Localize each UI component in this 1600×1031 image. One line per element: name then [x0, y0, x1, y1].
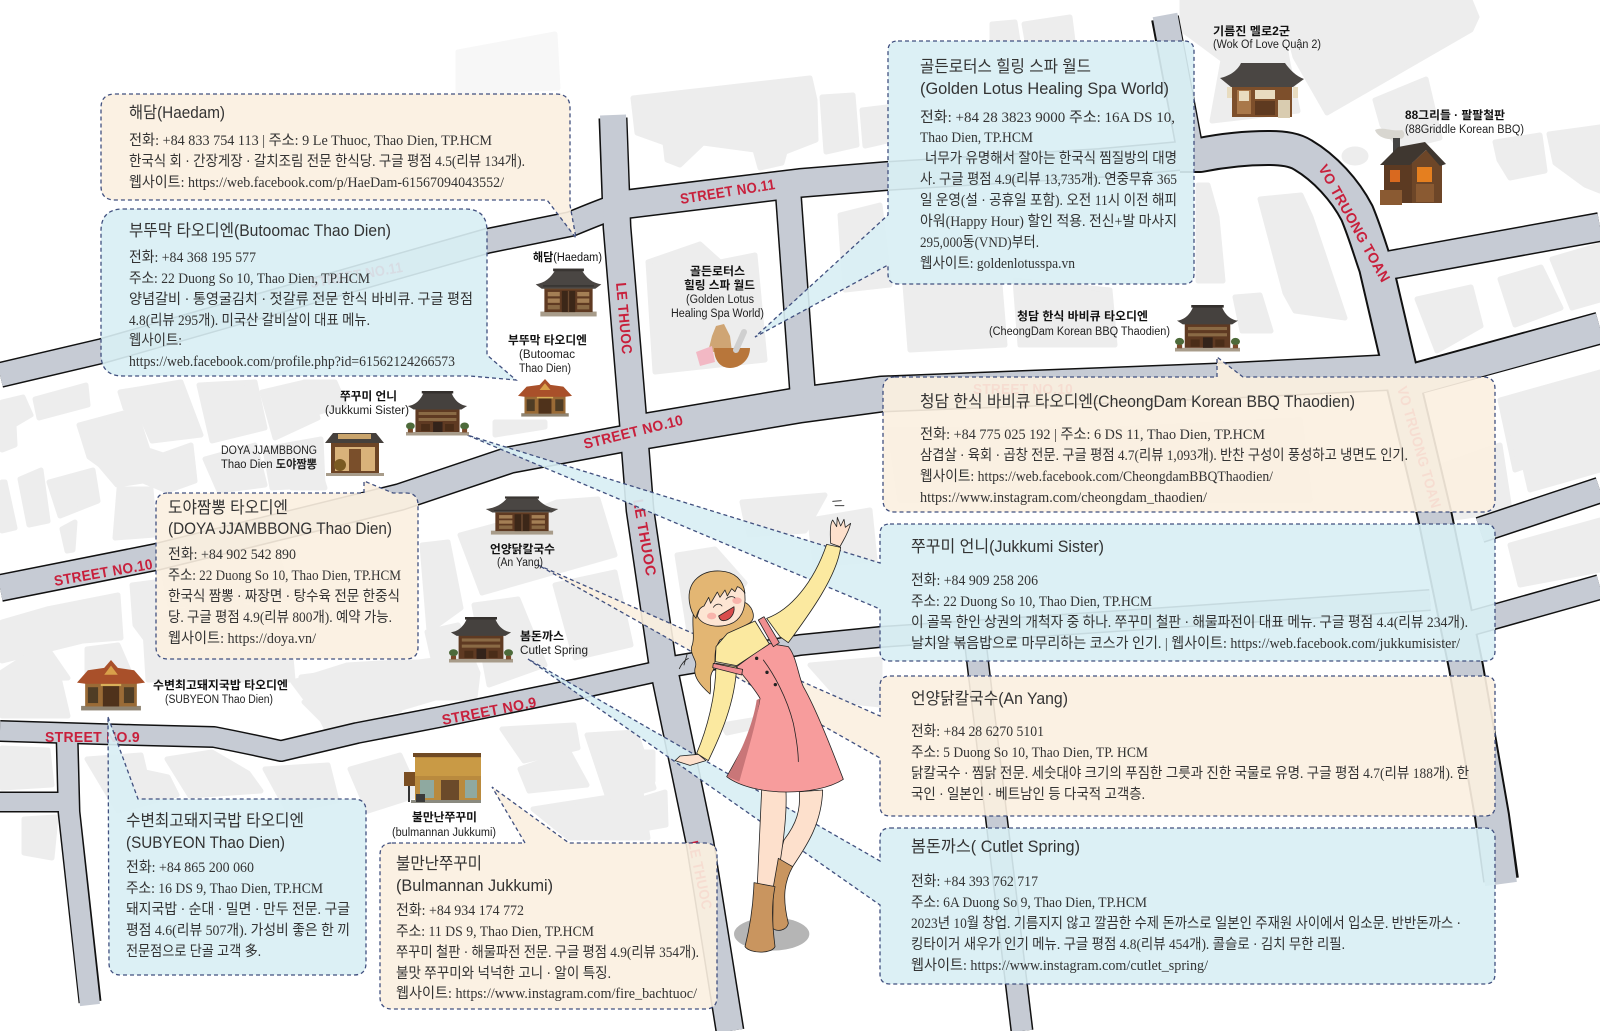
Golden Lotus details: [920, 109, 1177, 272]
Butoomac details: https://web.facebook.com/profile.php?id=61562124266573: [129, 354, 455, 370]
icon: Jukkumi building: [406, 391, 469, 436]
label: CheongDam: [989, 309, 1170, 338]
street name labels: STREET NO.10: [53, 557, 154, 590]
label: Cutlet Spring: [520, 629, 588, 657]
panel: CheongDam: [883, 357, 1495, 512]
Golden Lotus details: 너무가 유명해서 잘아는 한국식 찜질방의 대명: [925, 150, 1177, 167]
street name labels: VO TRUONG TOAN: [1393, 385, 1443, 510]
label: Golden Lotus: (Golden Lotus: [686, 294, 754, 306]
label: Subyeon: (SUBYEON Thao Dien): [165, 694, 273, 706]
street name labels: [45, 162, 1443, 911]
An Yang details: 닭칼국수 · 찜닭 전문. 세숫대야 크기의 푸짐한 그릇과 진한 국물로 유명. 구글 평점 4.7(리뷰 188개). 한: [911, 765, 1469, 782]
Golden Lotus details: 일 운영(설 · 공휴일 포함). 오전 11시 이전 해피: [920, 192, 1177, 209]
label: Cutlet Spring: 봄돈까스: [520, 629, 564, 643]
Cutlet Spring details: 2023년 10월 창업. 기름지지 않고 깔끔한 수제 돈까스로 일본인 주재원 사이에서 입소문. 반반돈까스 ·: [911, 915, 1461, 932]
icon: Golden Lotus spa bowl: [696, 324, 750, 368]
location labels: [153, 24, 1524, 839]
Subyeon title: 수변최고돼지국밥 타오디엔: [126, 811, 304, 830]
panel: Golden Lotus: [755, 41, 1194, 337]
label: Wok of Love: [1213, 24, 1321, 51]
panel: Bulmannan Jukkumi: [380, 787, 717, 1009]
character: waving girl in pink dress: [675, 501, 851, 952]
Bulmannan details: 쭈꾸미 철판 · 해물파전 전문. 구글 평점 4.9(리뷰 354개).: [396, 944, 699, 961]
Jukkumi details: 날치알 볶음밥으로 마무리하는 코스가 인기. | 웹사이트: https://web.facebook.com/jukkumisister/: [911, 635, 1461, 652]
Butoomac details: 양념갈비 · 통영굴김치 · 젓갈류 전문 한식 바비큐. 구글 평점: [129, 291, 473, 308]
Haedam details: 전화: +84 833 754 113 | 주소: 9 Le Thuoc, Thao Dien, TP.HCM: [129, 132, 492, 149]
panel: Cutlet Spring: [528, 659, 1495, 984]
CheongDam details: 웹사이트: https://web.facebook.com/CheongdamBBQThaodien/: [920, 468, 1274, 485]
Jukkumi details: 전화: +84 909 258 206: [911, 572, 1038, 589]
label: Butoomac: [508, 334, 587, 375]
Bulmannan details: 주소: 11 DS 9, Thao Dien, TP.HCM: [396, 924, 594, 940]
icon: Cutlet Spring building: [449, 617, 513, 662]
icon: Butoomac building: [518, 379, 572, 417]
Doya details: 한국식 짬뽕 · 짜장면 · 탕수육 전문 한중식: [168, 588, 400, 605]
panel: Subyeon: (SUBYEON Thao Dien): [126, 834, 285, 852]
label: Wok of Love: 기름진 멜로2군: [1213, 24, 1290, 38]
panel: An Yang: [538, 565, 1495, 816]
CheongDam details: 삼겹살 · 육회 · 곱창 전문. 구글 평점 4.7(리뷰 1,093개). 반찬 구성이 풍성하고 냉면도 인기.: [920, 447, 1408, 464]
label: Wok of Love: (Wok Of Love Quận 2): [1213, 39, 1321, 51]
An Yang details: 전화: +84 28 6270 5101: [911, 723, 1044, 740]
label: 88 Griddle: 88그리들 · 팔팔철판: [1405, 109, 1505, 122]
label: Jukkumi: (Jukkumi Sister): [325, 405, 409, 417]
Golden Lotus details: 전화: +84 28 3823 9000 주소: 16A DS 10,: [920, 109, 1175, 126]
Jukkumi title: 쭈꾸미 언니(Jukkumi Sister): [911, 537, 1104, 556]
icon: Doya shop: [325, 433, 384, 476]
Butoomac title: 부뚜막 타오디엔(Butoomac Thao Dien): [129, 221, 391, 240]
panel: Butoomac: [101, 209, 516, 380]
icon: Subyeon building: [77, 660, 145, 710]
Cutlet Spring details: 킹타이거 새우가 인기 메뉴. 구글 평점 4.8(리뷰 454개). 콜슬로 · 김치 무한 리필.: [911, 936, 1345, 953]
Jukkumi details: 주소: 22 Duong So 10, Thao Dien, TP.HCM: [911, 594, 1152, 610]
street name labels: LE THUOC: [612, 282, 634, 355]
icon: CheongDam building: [1175, 305, 1240, 351]
icon: Bulmannan shop: [404, 753, 481, 803]
CheongDam details: 전화: +84 775 025 192 | 주소: 6 DS 11, Thao Dien, TP.HCM: [920, 426, 1265, 443]
Doya details: 주소: 22 Duong So 10, Thao Dien, TP.HCM: [168, 568, 401, 584]
panel: Doya Jjambbong: (DOYA JJAMBBONG Thao Dien): [168, 520, 392, 538]
label: Doya: DOYA JJAMBBONG: [221, 445, 317, 457]
Cutlet Spring details: 주소: 6A Duong So 9, Thao Dien, TP.HCM: [911, 895, 1147, 911]
Golden Lotus details: 웹사이트: goldenlotusspa.vn: [920, 255, 1076, 272]
Subyeon details: [126, 859, 350, 960]
icon: Wok of Love building: [1220, 63, 1304, 118]
label: Bulmannan: (bulmannan Jukkumi): [392, 827, 496, 839]
label: Golden Lotus: 힐링 스파 월드: [684, 278, 755, 292]
Doya details: 전화: +84 902 542 890: [168, 546, 296, 563]
Subyeon details: 주소: 16 DS 9, Thao Dien, TP.HCM: [126, 881, 323, 897]
street name labels: STREET NO.9: [45, 730, 140, 746]
Golden Lotus title: 골든로터스 힐링 스파 월드: [920, 57, 1091, 76]
label: CheongDam: (CheongDam Korean BBQ Thaodien): [989, 326, 1170, 338]
street name labels: STREET NO.11: [679, 177, 776, 208]
Butoomac details: 4.8(리뷰 295개). 미국산 갈비살이 대표 메뉴.: [129, 312, 370, 329]
panel: Bulmannan Jukkumi: (Bulmannan Jukkumi): [396, 877, 553, 895]
street name labels: VO TRUONG TOAN: [1315, 162, 1392, 285]
icon: An Yang building: [486, 496, 558, 535]
Cutlet Spring title: 봄돈까스( Cutlet Spring): [911, 837, 1080, 856]
label: An Yang: [490, 542, 555, 569]
label: Golden Lotus: 골든로터스: [690, 265, 745, 278]
An Yang details: 주소: 5 Duong So 10, Thao Dien, TP. HCM: [911, 745, 1148, 761]
Doya details: 당. 구글 평점 4.9(리뷰 800개). 예약 가능.: [168, 609, 392, 626]
Subyeon details: 전문점으로 단골 고객 多.: [126, 942, 261, 960]
Golden Lotus details: 사. 구글 평점 4.9(리뷰 13,735개). 연중무휴 365: [920, 171, 1177, 188]
Butoomac details: 전화: +84 368 195 577: [129, 249, 256, 266]
Cutlet Spring details: 웹사이트: https://www.instagram.com/cutlet_spring/: [911, 957, 1209, 974]
Bulmannan details: [396, 902, 699, 1002]
label: Haedam: 해담(Haedam): [533, 251, 602, 264]
An Yang title: 언양닭칼국수(An Yang): [911, 689, 1068, 708]
Doya details: [168, 546, 401, 647]
panel: Haedam: [101, 94, 576, 238]
Golden Lotus details: Thao Dien, TP.HCM: [920, 130, 1033, 146]
label: Butoomac: (Butoomac: [519, 349, 575, 361]
street name labels: STREET NO.10: [973, 382, 1073, 398]
panel: Subyeon: [108, 717, 366, 975]
panel: Doya Jjambbong: [156, 481, 418, 659]
street name labels: LE THUOC: [684, 840, 714, 911]
Golden Lotus details: 아워(Happy Hour) 할인 적용. 전신+발 마사지: [920, 213, 1177, 230]
Subyeon details: 전화: +84 865 200 060: [126, 859, 254, 876]
label: CheongDam: 청담 한식 바비큐 타오디엔: [1017, 309, 1148, 323]
street name labels: STREET NO.10: [582, 413, 685, 453]
Butoomac details: 웹사이트:: [129, 332, 182, 349]
label: Cutlet Spring: Cutlet Spring: [520, 645, 588, 657]
Bulmannan details: 웹사이트: https://www.instagram.com/fire_bachtuoc/: [396, 985, 698, 1002]
Bulmannan details: 불맛 쭈꾸미와 넉넉한 고니 · 알이 특징.: [396, 965, 611, 982]
icon: Haedam building: [536, 269, 601, 316]
CheongDam title: 청담 한식 바비큐 타오디엔(CheongDam Korean BBQ Thaodien): [920, 392, 1355, 411]
label: Subyeon: 수변최고돼지국밥 타오디엔: [153, 678, 288, 692]
Doya details: 웹사이트: https://doya.vn/: [168, 630, 317, 647]
Butoomac details: [129, 249, 473, 370]
CheongDam details: [920, 426, 1408, 506]
Cutlet Spring details: 전화: +84 393 762 717: [911, 873, 1038, 890]
label: Golden Lotus: Healing Spa World): [671, 308, 764, 320]
Cutlet Spring details: [911, 873, 1461, 974]
label: Butoomac: Thao Dien): [519, 363, 571, 375]
Subyeon details: 돼지국밥 · 순대 · 밀면 · 만두 전문. 구글: [126, 901, 350, 918]
label: An Yang: 언양닭칼국수: [490, 542, 555, 556]
label: Golden Lotus: [671, 265, 764, 320]
Doya title: 도야짬뽕 타오디엔: [168, 498, 288, 517]
Haedam details: [129, 132, 525, 191]
icon: 88 Griddle cabin: [1375, 129, 1446, 205]
street name labels: STREET NO.11: [309, 260, 404, 292]
label: 88 Griddle: (88Griddle Korean BBQ): [1405, 124, 1524, 136]
label: 88 Griddle: [1405, 109, 1524, 136]
Subyeon details: 평점 4.6(리뷰 507개). 가성비 좋은 한 끼: [126, 922, 350, 939]
Golden Lotus details: 295,000동(VND)부터.: [920, 234, 1039, 251]
street name labels: LE THUOC: [629, 498, 658, 578]
label: Bulmannan: [392, 811, 496, 839]
label: Subyeon: [153, 678, 288, 706]
label: Doya: [221, 445, 317, 471]
Haedam details: 한국식 회 · 간장게장 · 갈치조림 전문 한식당. 구글 평점 4.5(리뷰 134개).: [129, 153, 525, 170]
label: Butoomac: 부뚜막 타오디엔: [508, 334, 587, 347]
Butoomac details: 주소: 22 Duong So 10, Thao Dien, TP.HCM: [129, 271, 370, 287]
label: Jukkumi: [325, 390, 409, 417]
street name labels: STREET NO.9: [441, 695, 538, 729]
Bulmannan title: 불만난쭈꾸미: [396, 854, 482, 873]
Haedam details: 웹사이트: https://web.facebook.com/p/HaeDam-61567094043552/: [129, 174, 505, 191]
CheongDam details: https://www.instagram.com/cheongdam_thaodien/: [920, 490, 1208, 506]
An Yang details: 국인 · 일본인 · 베트남인 등 다국적 고객층.: [911, 786, 1145, 803]
label: Jukkumi: 쭈꾸미 언니: [340, 390, 397, 403]
label: Doya: Thao Dien 도야짬뽕: [221, 457, 317, 471]
Bulmannan details: 전화: +84 934 174 772: [396, 902, 524, 919]
An Yang details: [911, 723, 1469, 803]
panel: Golden Lotus: (Golden Lotus Healing Spa World): [920, 80, 1169, 98]
Haedam title: 해담(Haedam): [129, 103, 225, 122]
label: An Yang: (An Yang): [497, 557, 543, 569]
panel: Jukkumi Sister: [467, 435, 1495, 661]
Jukkumi details: [911, 572, 1468, 652]
Jukkumi details: 이 골목 한인 상권의 개척자 중 하나. 쭈꾸미 철판 · 해물파전이 대표 메뉴. 구글 평점 4.4(리뷰 234개).: [911, 614, 1468, 631]
label: Bulmannan: 불만난쭈꾸미: [412, 811, 477, 824]
